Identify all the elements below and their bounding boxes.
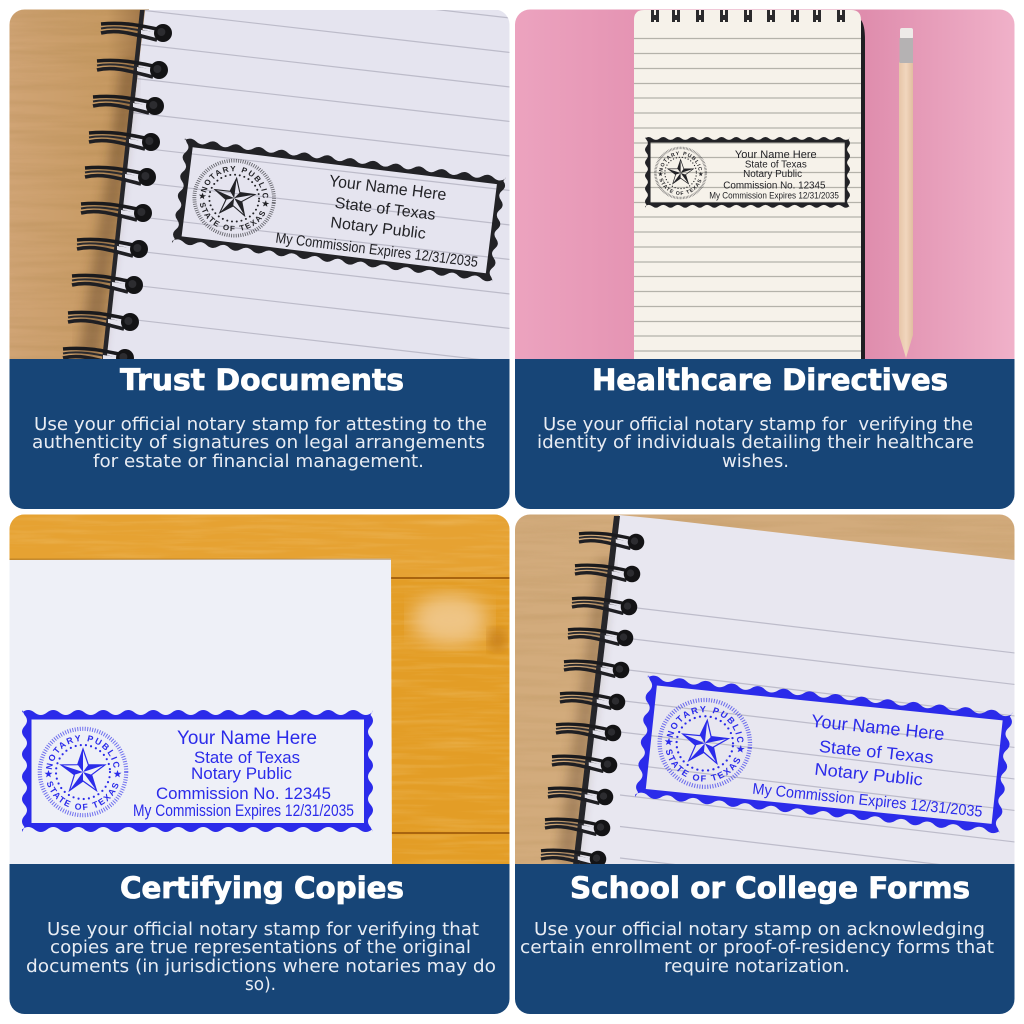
stamp: blue notary impression: Notary Public (814, 759, 924, 789)
description: Use your official notary stamp for verifying that (47, 920, 479, 940)
description: identity of individuals detailing their healthcare (537, 433, 974, 453)
stamp: blue notary impression with commission number: Commission No. 12345 (156, 784, 331, 803)
description: Use your official notary stamp for attesting to the (34, 415, 487, 435)
photo: notepad and pencil on pink (515, 9, 1015, 361)
stamp: black notary impression: My Commission Expires 12/31/2035 (275, 230, 479, 271)
photo: spiral notebook on wood (9, 0, 510, 367)
stamp: black notary impression with commission number: My Commission Expires 12/31/2035 (709, 191, 839, 201)
stamp: blue notary impression (634, 675, 1013, 834)
stamp: black notary impression: Your Name Here (328, 172, 447, 204)
caption background (514, 359, 1015, 510)
stamp: blue notary impression: Your Name Here (810, 710, 946, 744)
description (26, 920, 496, 995)
stamp: blue notary impression with commission number: State of Texas (194, 748, 300, 767)
description (538, 416, 973, 468)
description: documents (in jurisdictions where notaries may do (26, 957, 496, 977)
icon: pencil (899, 28, 913, 358)
stamp: blue notary impression with commission number: Notary Public (191, 764, 292, 783)
stamp: black notary impression: Notary Public (329, 214, 427, 243)
stamp: black notary impression: State of Texas (334, 194, 437, 224)
stamp: black notary impression with commission number (645, 137, 850, 208)
heading: Certifying Copies (120, 871, 404, 905)
panel: Healthcare Directives (515, 10, 1014, 509)
heading: School or College Forms (570, 871, 970, 905)
panel: School or College Forms (515, 514, 1014, 1014)
stamp: black notary impression with commission number: Notary Public (743, 169, 802, 180)
panel: Trust Documents (10, 10, 510, 509)
stamp: blue notary impression: NOTARY PUBLIC (666, 706, 744, 742)
stamp: blue notary impression with commission number: STATE OF TEXAS (47, 781, 118, 810)
stamp: black notary impression with commission number: Commission No. 12345 (723, 181, 826, 192)
stamp: blue notary impression with commission number: NOTARY PUBLIC (46, 735, 120, 770)
description: authenticity of signatures on legal arrangements (32, 433, 485, 453)
caption background (9, 359, 510, 510)
stamp: black notary impression with commission number: STATE OF TEXAS (660, 178, 702, 196)
stamp: blue notary impression: My Commission Expires 12/31/2035 (752, 781, 983, 821)
description: Use your official notary stamp on acknowledging (534, 920, 985, 940)
heading: Trust Documents (120, 363, 404, 397)
heading: Healthcare Directives (592, 363, 948, 397)
stamp: blue notary impression: State of Texas (818, 736, 935, 767)
description: for estate or financial management. (93, 452, 424, 472)
caption background (514, 864, 1015, 1015)
stamp: black notary impression: STATE OF TEXAS (200, 202, 266, 232)
description (520, 920, 994, 977)
stamp: black notary impression with commission number: NOTARY PUBLIC (659, 152, 702, 172)
caption background (9, 864, 510, 1015)
photo: paper on orange wood (9, 514, 510, 866)
photo: spiral notebook on wood (515, 514, 1014, 864)
stamp: black notary impression: NOTARY PUBLIC (200, 166, 268, 198)
stamp: blue notary impression: STATE OF TEXAS (666, 749, 740, 782)
description (32, 415, 487, 472)
description: Use your official notary stamp for verifying the (543, 415, 973, 435)
description: certain enrollment or proof-of-residency forms that (520, 938, 994, 958)
stamp: blue notary impression with commission number: My Commission Expires 12/31/2035 (133, 802, 354, 820)
stamp: black notary impression with commission number: State of Texas (745, 160, 807, 171)
stamp: blue notary impression with commission number: Your Name Here (177, 728, 317, 749)
description: wishes. (722, 452, 789, 472)
description: copies are true representations of the original (50, 938, 471, 958)
stamp: black notary impression (172, 138, 506, 282)
stamp: black notary impression with commission number: Your Name Here (735, 149, 817, 161)
description: require notarization. (664, 957, 850, 977)
stamp: blue notary impression with commission number (22, 710, 373, 832)
description: so). (245, 975, 276, 995)
panel: Certifying Copies (10, 514, 510, 1014)
